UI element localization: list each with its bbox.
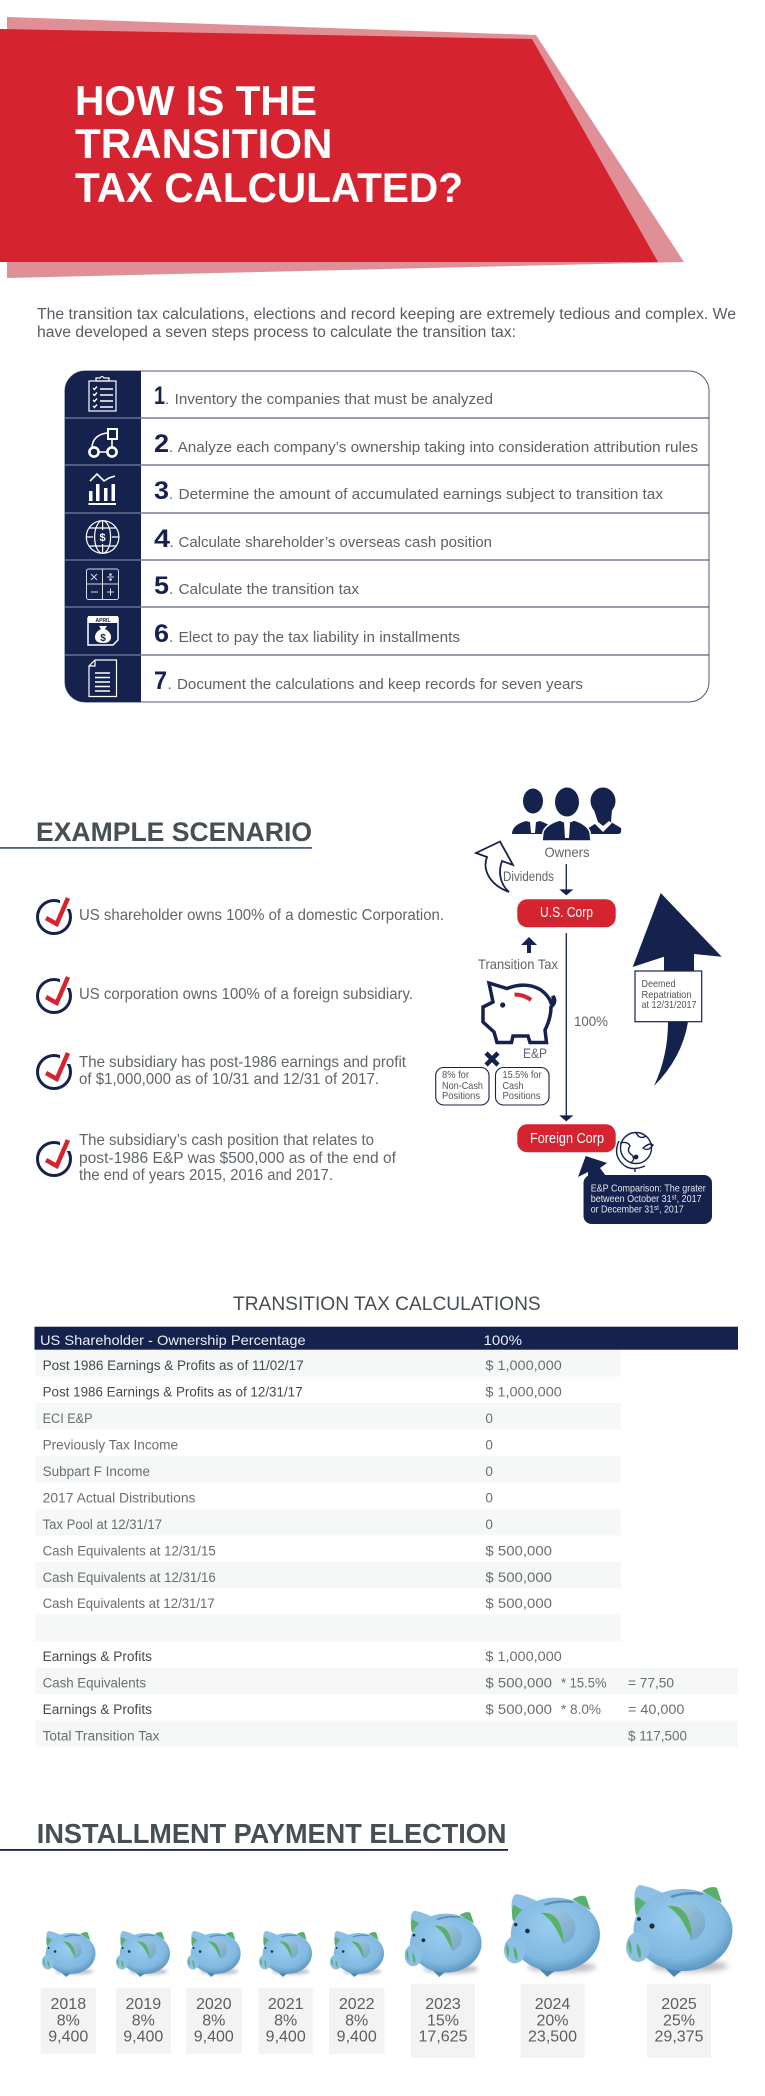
table: transition tax calculations: $ 500,000	[485, 1596, 552, 1611]
table: transition tax calculations: Post 1986 Earnings & Profits as of 12/31/17	[43, 1384, 303, 1400]
scenario point 2	[38, 974, 413, 1012]
installment 2018	[41, 1931, 96, 2054]
intro text: The transition tax calculations, elections and record keeping are extremely tedious and complex. We	[37, 306, 736, 323]
installment 2023: 15%	[427, 2013, 459, 2030]
table: transition tax calculations: * 8.0%	[561, 1702, 601, 1717]
step 6: .	[169, 629, 173, 646]
table: transition tax calculations: Subpart F Income	[43, 1464, 150, 1479]
table: transition tax calculations: 2017 Actual Distributions	[43, 1490, 196, 1505]
step 4: .	[170, 534, 174, 551]
installment 2019: 8%	[132, 2013, 155, 2030]
heading: transition tax calculations: TRANSITION TAX CALCULATIONS	[233, 1293, 541, 1315]
installment 2025: 25%	[663, 2013, 695, 2030]
icon: red check in circle	[38, 974, 74, 1012]
installment 2019	[116, 1931, 171, 2054]
table: transition tax calculations: * 15.5%	[561, 1676, 606, 1691]
icon: document	[89, 660, 116, 696]
step 1	[89, 376, 493, 411]
table: transition tax calculations	[34, 1327, 738, 1747]
box: 15.5 percent: Cash	[502, 1080, 524, 1092]
table: transition tax calculations: = 40,000	[628, 1702, 684, 1717]
step 4	[86, 521, 492, 553]
callout: E&P comparison: between October 31ˢᵗ, 2017	[591, 1193, 702, 1205]
table: transition tax calculations: = 77,50	[628, 1676, 674, 1691]
arrow: transition tax up	[521, 937, 537, 953]
installment 2024: 2024	[535, 1996, 570, 2013]
installment 2023: 17,625	[419, 2029, 468, 2046]
installment 2018: 8%	[57, 2013, 80, 2030]
step 2: Analyze each company’s ownership taking into consideration attribution rules	[178, 439, 698, 456]
step 3: Determine the amount of accumulated earnings subject to transition tax	[178, 486, 664, 503]
arrow: E&P comparison pointer	[578, 1156, 607, 1177]
icon: ownership flow	[89, 429, 117, 457]
table header row: US Shareholder - Ownership Percentage	[40, 1332, 306, 1348]
panel: seven steps	[65, 371, 709, 702]
diagram: ownership structure: Transition Tax	[478, 956, 558, 972]
step 7: .	[168, 676, 172, 693]
box: 8 percent: 8% for	[442, 1069, 469, 1081]
callout: E&P comparison: or December 31ˢᵗ, 2017	[591, 1204, 684, 1216]
step 5: 5	[154, 572, 169, 600]
box: 15.5 percent	[496, 1068, 549, 1105]
installment 2023	[405, 1911, 482, 2058]
diagram: ownership structure: Owners	[544, 844, 590, 860]
table: transition tax calculations: Earnings & Profits	[43, 1649, 152, 1664]
icon: April calendar money bag: APRIL	[96, 618, 110, 624]
step 5: Calculate the transition tax	[178, 581, 360, 598]
step 4: Calculate shareholder’s overseas cash position	[178, 534, 492, 551]
scenario point 1	[38, 895, 444, 934]
intro text: have developed a seven steps process to calculate the transition tax:	[37, 324, 516, 341]
step 2	[89, 429, 698, 458]
installment 2018: 2018	[51, 1996, 86, 2013]
table: transition tax calculations: 0	[485, 1437, 493, 1452]
step 1: .	[165, 391, 169, 408]
icon: red check in circle	[38, 1050, 74, 1088]
installment 2025	[626, 1885, 732, 2058]
table: transition tax calculations: Cash Equivalents at 12/31/17	[43, 1596, 215, 1611]
step 1: Inventory the companies that must be analyzed	[175, 391, 493, 408]
box: deemed repatriation: at 12/31/2017	[642, 999, 697, 1011]
table: transition tax calculations: $ 500,000	[485, 1702, 552, 1717]
step 6: 6	[154, 620, 169, 648]
table: transition tax calculations: $ 500,000	[485, 1570, 552, 1585]
table: transition tax calculations: 0	[485, 1464, 493, 1479]
box: deemed repatriation: Deemed	[642, 978, 676, 990]
scenario point 3	[38, 1050, 407, 1088]
table: transition tax calculations: 0	[485, 1490, 493, 1505]
arrow: deemed repatriation	[633, 893, 722, 1086]
intro text	[37, 306, 736, 341]
table: transition tax calculations: $ 117,500	[628, 1729, 687, 1744]
box: U.S. Corp: U.S. Corp	[540, 904, 593, 921]
title: HOW IS THE	[75, 77, 317, 124]
table: transition tax calculations: ECI E&P	[43, 1411, 93, 1426]
table: transition tax calculations: $ 1,000,000	[485, 1649, 562, 1664]
installment 2020: 2020	[196, 1996, 232, 2013]
icon: globe on stand	[617, 1132, 653, 1172]
scenario point 2: US corporation owns 100% of a foreign subsidiary.	[79, 986, 413, 1003]
table: transition tax calculations: Cash Equivalents at 12/31/15	[43, 1543, 216, 1558]
step 7	[89, 660, 583, 696]
box: 8 percent	[436, 1068, 489, 1105]
scenario point 4: the end of years 2015, 2016 and 2017.	[79, 1167, 333, 1184]
installment 2022: 2022	[339, 1996, 375, 2013]
installment 2021: 8%	[274, 2013, 297, 2030]
table: transition tax calculations: Total Transition Tax	[43, 1729, 160, 1744]
icon: multiply sign	[486, 1053, 498, 1065]
table header row	[34, 1327, 738, 1350]
diagram: ownership structure	[436, 788, 722, 1224]
step 7: 7	[154, 667, 167, 695]
icon: owners group	[512, 788, 621, 841]
table: transition tax calculations: $ 500,000	[485, 1676, 552, 1691]
box: Foreign Corp: Foreign Corp	[530, 1130, 604, 1147]
installment 2025: 29,375	[655, 2029, 704, 2046]
icon: April calendar money bag	[88, 616, 118, 645]
scenario point 3: The subsidiary has post-1986 earnings and profit	[79, 1054, 407, 1071]
step 1: 1	[154, 382, 165, 410]
box: Foreign Corp	[517, 1124, 616, 1152]
step 3: 3	[154, 477, 169, 505]
scenario point 1: US shareholder owns 100% of a domestic Corporation.	[79, 907, 444, 924]
installment 2021: 9,400	[266, 2029, 306, 2046]
installment 2022: 8%	[345, 2013, 368, 2030]
step 6	[88, 616, 460, 648]
installment 2023: 2023	[425, 1996, 461, 2013]
installment 2022: 9,400	[337, 2029, 377, 2046]
table: transition tax calculations: 0	[485, 1517, 493, 1532]
box: 8 percent: Non-Cash	[442, 1080, 483, 1092]
table: transition tax calculations: Tax Pool at 12/31/17	[43, 1517, 162, 1532]
installment 2024: 20%	[536, 2013, 569, 2030]
installment 2024	[504, 1894, 600, 2058]
title	[75, 77, 463, 211]
step 3: .	[169, 486, 173, 503]
callout: E&P comparison: E&P Comparison: The grater	[591, 1183, 706, 1195]
table: transition tax calculations: Earnings & Profits	[43, 1702, 152, 1717]
callout: E&P comparison	[584, 1175, 712, 1224]
box: deemed repatriation: Repatriation	[642, 989, 692, 1001]
installment 2019: 2019	[126, 1996, 161, 2013]
box: 15.5 percent: Positions	[502, 1090, 540, 1102]
step 2: .	[169, 439, 173, 456]
installment 2020: 9,400	[194, 2029, 234, 2046]
table: transition tax calculations: 0	[485, 1411, 493, 1426]
scenario point 4: post-1986 E&P was $500,000 as of the end of	[79, 1150, 397, 1167]
arrow: U.S. Corp to Foreign Corp	[561, 933, 572, 1120]
installment 2022	[329, 1931, 384, 2054]
step 6: Elect to pay the tax liability in installments	[178, 629, 460, 646]
icon: bar chart with trend	[88, 474, 116, 505]
icon: globe with dollar: $	[100, 532, 106, 544]
installment 2020	[186, 1931, 242, 2054]
installment 2021	[258, 1931, 313, 2054]
installment 2020: 8%	[202, 2013, 225, 2030]
diagram: ownership structure: 100%	[574, 1013, 608, 1029]
scenario point 4	[38, 1132, 397, 1184]
icon: April calendar money bag: $	[100, 633, 106, 644]
icon: clipboard checklist	[89, 376, 116, 411]
box: 15.5 percent: 15.5% for	[502, 1069, 542, 1081]
scenario point 3: of $1,000,000 as of 10/31 and 12/31 of 2017.	[79, 1071, 379, 1088]
box: deemed repatriation	[635, 971, 702, 1022]
table: transition tax calculations: Cash Equivalents	[43, 1676, 146, 1691]
box: U.S. Corp	[517, 899, 616, 927]
icon: red check in circle	[38, 895, 74, 934]
installment 2018: 9,400	[48, 2029, 88, 2046]
arrow: dividends	[476, 842, 513, 892]
scenario point 4: The subsidiary’s cash position that relates to	[79, 1132, 374, 1149]
title: TRANSITION	[75, 120, 332, 167]
installment 2021: 2021	[268, 1996, 304, 2013]
heading: installment payment election: INSTALLMENT PAYMENT ELECTION	[37, 1818, 507, 1849]
table header row: 100%	[484, 1332, 522, 1348]
table: transition tax calculations: Previously Tax Income	[43, 1437, 178, 1452]
icon: calculator operators	[86, 569, 118, 600]
table: transition tax calculations: $ 500,000	[485, 1543, 552, 1558]
table: transition tax calculations: $ 1,000,000	[485, 1384, 562, 1400]
banner	[0, 17, 684, 278]
installment 2024: 23,500	[528, 2029, 577, 2046]
icon: red check in circle	[38, 1137, 74, 1176]
step 5: .	[169, 581, 173, 598]
icon: piggy bank outline	[483, 983, 555, 1042]
step 7: Document the calculations and keep records for seven years	[177, 676, 583, 693]
diagram: ownership structure: Dividends	[503, 868, 554, 884]
installment 2025: 2025	[661, 1996, 697, 2013]
step 4: 4	[154, 525, 170, 553]
title: TAX CALCULATED?	[75, 164, 463, 211]
step 3	[88, 474, 664, 505]
installment 2019: 9,400	[123, 2029, 163, 2046]
heading: example scenario: EXAMPLE SCENARIO	[36, 817, 312, 847]
diagram: ownership structure: E&P	[523, 1045, 547, 1061]
step 2: 2	[154, 430, 169, 458]
arrow: owners to U.S. Corp	[561, 864, 572, 894]
box: 8 percent: Positions	[442, 1090, 480, 1102]
table: transition tax calculations: Cash Equivalents at 12/31/16	[43, 1570, 216, 1585]
icon: globe with dollar	[86, 521, 119, 553]
table: transition tax calculations: $ 1,000,000	[485, 1358, 562, 1373]
step 5	[86, 569, 360, 600]
table: transition tax calculations: Post 1986 Earnings & Profits as of 11/02/17	[43, 1358, 304, 1373]
